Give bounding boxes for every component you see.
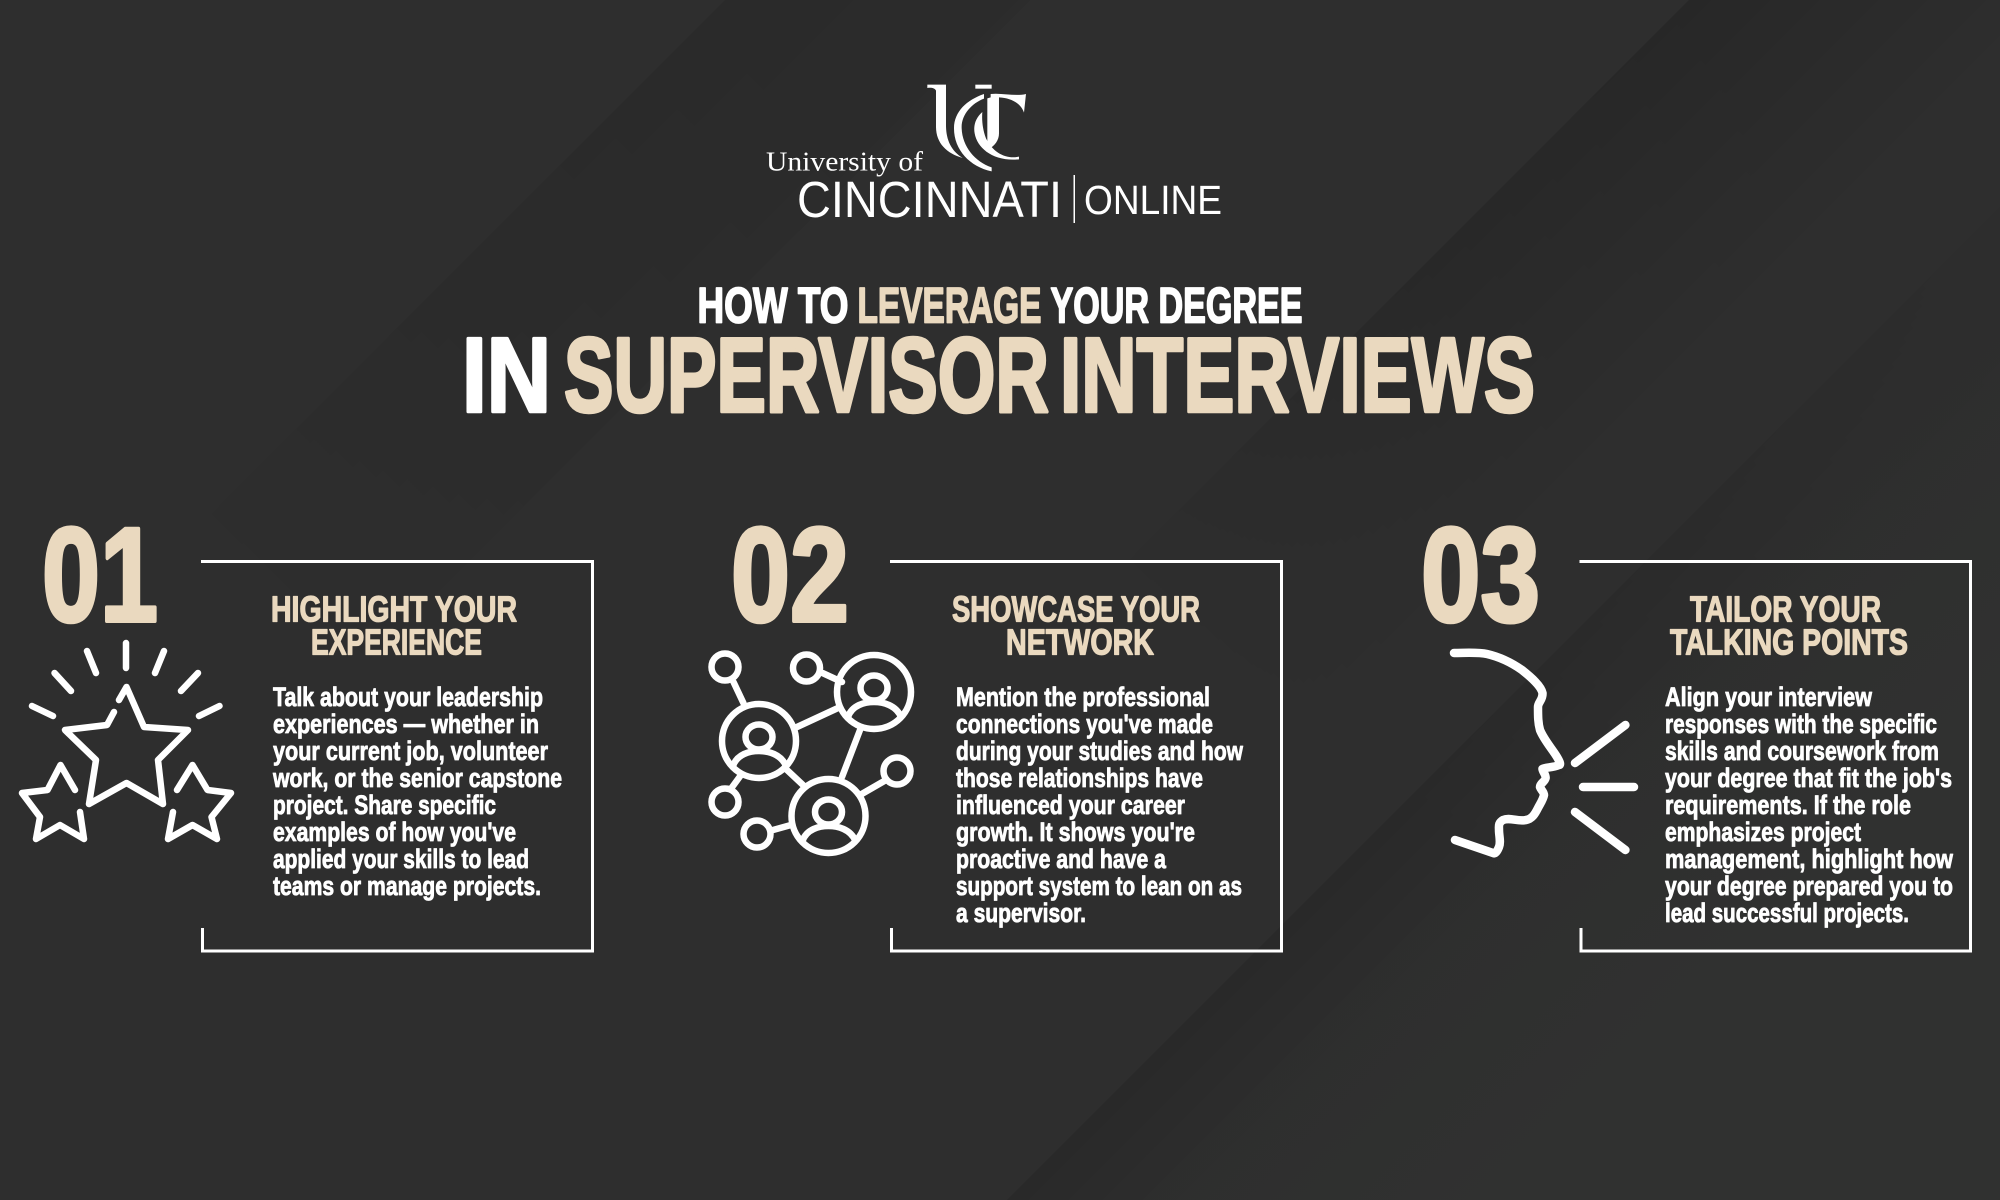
title xyxy=(462,278,1535,434)
body text 02: Mention the professional xyxy=(956,682,1210,712)
panel frame 02 xyxy=(890,562,1282,951)
heading 02 xyxy=(952,588,1200,662)
panel: tip 01 highlight your experience xyxy=(22,501,592,951)
body text 03: Align your interview xyxy=(1665,682,1873,712)
heading 01: EXPERIENCE xyxy=(311,622,482,662)
heading 01: HIGHLIGHT YOUR xyxy=(271,588,517,630)
logo divider xyxy=(1074,175,1075,223)
title line one: YOUR DEGREE xyxy=(1050,278,1302,334)
title line two: SUPERVISOR xyxy=(564,316,1049,434)
body text 01: Talk about your leadership xyxy=(273,682,543,712)
logo wordmark: Cincinnati: CINCINNATI xyxy=(797,171,1062,228)
body text 01: experiences — whether in xyxy=(273,709,539,739)
panel frame 01 xyxy=(201,562,592,951)
body text 02: connections you've made xyxy=(956,709,1213,739)
number 01: 01 xyxy=(42,501,158,650)
logo wordmark: Online: ONLINE xyxy=(1084,177,1222,223)
body text 02: a supervisor. xyxy=(956,898,1086,928)
heading 02: NETWORK xyxy=(1006,622,1155,662)
body text 01: project. Share specific xyxy=(273,790,496,820)
heading 03: TALKING POINTS xyxy=(1670,622,1908,662)
heading 02: SHOWCASE YOUR xyxy=(952,588,1200,630)
logo: University of Cincinnati Online xyxy=(766,85,1222,228)
icon: three stars with rays xyxy=(22,643,231,839)
title line one: HOW TO xyxy=(698,278,848,334)
body text 03 xyxy=(1665,682,1954,928)
body text 01: teams or manage projects. xyxy=(273,871,541,901)
title line two: INTERVIEWS xyxy=(1060,316,1535,434)
icon: people network xyxy=(712,654,911,853)
body text 03: lead successful projects. xyxy=(1665,898,1909,928)
title line two: IN xyxy=(462,316,551,434)
heading 03 xyxy=(1670,588,1908,662)
logo wordmark: University of: University of xyxy=(766,146,923,176)
body text 01 xyxy=(272,682,562,901)
number 02: 02 xyxy=(731,501,849,650)
body text 02 xyxy=(956,682,1244,928)
panel: tip 03 tailor your talking points xyxy=(1421,501,1970,951)
body text 03: requirements. If the role xyxy=(1665,790,1911,820)
icon: speaking head profile xyxy=(1454,653,1634,853)
body text 02: those relationships have xyxy=(956,763,1203,793)
body text 01: examples of how you've xyxy=(273,817,516,847)
heading 01 xyxy=(271,588,517,662)
number 03: 03 xyxy=(1421,501,1540,650)
body text 02: support system to lean on as xyxy=(956,871,1242,901)
icon: UC monogram xyxy=(927,85,1026,171)
body text 02: influenced your career xyxy=(956,790,1185,820)
body text 01: your current job, volunteer xyxy=(273,736,548,766)
panel frame 03 xyxy=(1580,562,1970,951)
body text 01: applied your skills to lead xyxy=(273,844,529,874)
title line two xyxy=(462,316,1535,434)
body text 02: growth. It shows you're xyxy=(956,817,1195,847)
body text 02: during your studies and how xyxy=(956,736,1244,766)
title line one xyxy=(698,278,1302,334)
panel: tip 02 showcase your network xyxy=(712,501,1282,951)
heading 03: TAILOR YOUR xyxy=(1690,588,1881,630)
body text 01: work, or the senior capstone xyxy=(272,763,562,793)
title line one: LEVERAGE xyxy=(858,278,1042,334)
body text 02: proactive and have a xyxy=(956,844,1167,874)
body text 03: emphasizes project xyxy=(1665,817,1861,847)
